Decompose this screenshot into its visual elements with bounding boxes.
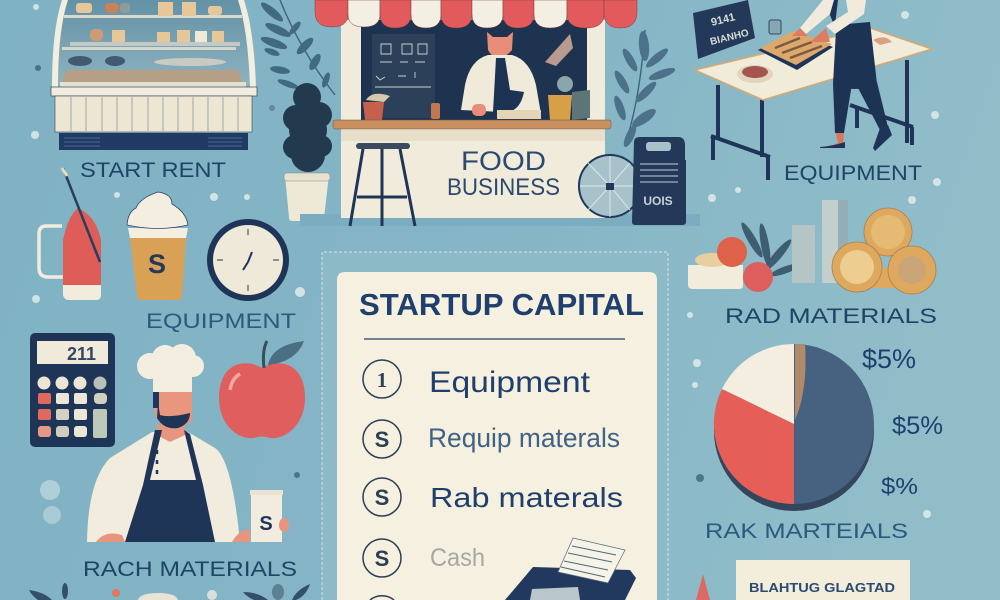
greens (739, 221, 800, 278)
rolls (832, 208, 936, 294)
icon: wall clock (207, 219, 289, 301)
small items on table (873, 37, 892, 45)
slice: blue (794, 344, 874, 504)
tray of food (758, 31, 833, 70)
chef hat (137, 344, 204, 392)
item 5 circle (370, 596, 394, 600)
plant: potted tree (283, 83, 332, 221)
icon: red pencil (696, 574, 710, 600)
heading: equipment left: EQUIPMENT (146, 310, 296, 333)
pie labels (862, 344, 943, 499)
pie chart (714, 344, 874, 511)
chef neck and face (157, 425, 185, 442)
plant: right of stall (612, 30, 677, 149)
stall sign text (447, 146, 560, 201)
pie labels: $5% (862, 344, 916, 374)
menu sign (693, 0, 755, 59)
chef body (87, 432, 240, 542)
bottom left foliage and bowl (29, 583, 310, 600)
bottom right label box: BLAHTUG GLAGTAD (749, 580, 895, 595)
heading: start rent: START RENT (80, 159, 226, 182)
pie labels: $5% (892, 412, 943, 440)
stall window (361, 20, 587, 120)
stool (350, 143, 415, 226)
heading: rad materials: RAD MATERIALS (725, 305, 937, 328)
shop worker (461, 32, 541, 119)
item 1: 1 (377, 368, 387, 392)
tomato (717, 237, 747, 267)
item 4 (363, 539, 485, 577)
slice: tan sliver (795, 344, 806, 420)
heading: rak materials: RAK MARTEIALS (705, 520, 908, 543)
icon: wheel (579, 155, 641, 217)
dashed frame (322, 252, 668, 600)
item 2: S (375, 427, 389, 452)
slice: cream (722, 344, 794, 424)
chef (87, 344, 289, 542)
icon: apple (219, 341, 305, 438)
icon: coffee cup (127, 192, 188, 300)
menu sign: 9141 (710, 11, 736, 29)
pie depth (714, 351, 874, 511)
beard (157, 402, 190, 428)
item 3 (363, 478, 623, 516)
slice: red (714, 389, 794, 504)
item 1: Equipment (429, 366, 591, 399)
counter top (333, 120, 611, 129)
stall sign text: FOOD (461, 146, 546, 176)
decorative sparkles (31, 4, 941, 524)
item 1 (363, 360, 591, 399)
pie labels: $% (881, 473, 918, 499)
icon: coffee cup: S (148, 249, 166, 279)
icon: calculator (30, 333, 115, 447)
box and bread (688, 265, 743, 289)
red fruit (743, 262, 773, 292)
stall walls (341, 20, 605, 218)
cup in hand: S (259, 513, 273, 535)
counter goods (363, 34, 590, 120)
cook figure (792, 0, 892, 151)
stall sign text: BUSINESS (447, 174, 560, 201)
plant: leafy branch upper (259, 0, 335, 95)
raw materials illustration (688, 200, 936, 294)
icon: sign board (632, 137, 686, 225)
awning (315, 0, 637, 28)
icon: receipt printer (505, 538, 636, 600)
item 2: Requip materals (428, 423, 620, 453)
bottom right label box (736, 560, 910, 600)
item 4: S (375, 546, 389, 571)
table scene with cook (693, 0, 932, 180)
grey bars (792, 200, 848, 283)
table legs (711, 60, 913, 180)
item 2 (363, 420, 620, 458)
heading: equipment right: EQUIPMENT (784, 162, 922, 185)
cup in hand (232, 490, 289, 542)
item 3: S (375, 485, 389, 510)
panel: startup capital (337, 272, 657, 600)
display case (51, 0, 257, 150)
plate and glass (737, 20, 781, 83)
item 4: Cash (430, 544, 485, 572)
item 3: Rab materals (430, 482, 623, 513)
apron (125, 430, 215, 542)
food stall (300, 0, 700, 226)
panel title: STARTUP CAPITAL (359, 287, 644, 322)
title rule (364, 338, 625, 340)
heading: rach materials: RACH MATERIALS (83, 558, 297, 581)
stall shadow (300, 214, 700, 226)
icon: red drink jug (39, 168, 101, 300)
icon: calculator: 211 (67, 344, 96, 364)
chalkboard (372, 34, 435, 118)
menu sign: BIANHO (709, 28, 750, 48)
icon: sign board: UOIS (643, 194, 673, 208)
table top (695, 28, 932, 100)
